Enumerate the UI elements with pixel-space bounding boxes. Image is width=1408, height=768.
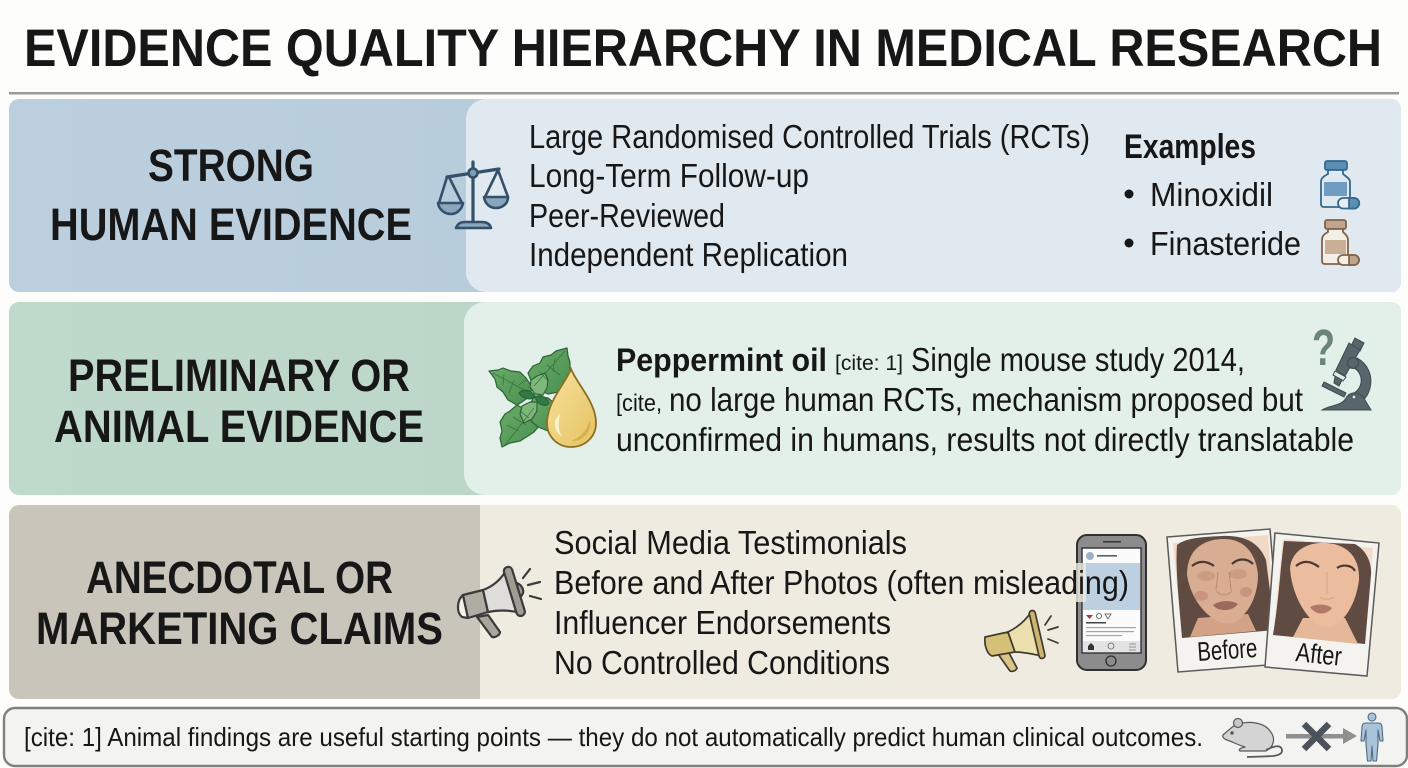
panel: strong human evidence [9,99,1401,292]
content area anecdotal [480,505,1401,699]
icon: smartphone with social post [1076,535,1146,670]
band background preliminary [9,302,1401,495]
photo: before: Before [1196,633,1258,667]
icon: peppermint leaves and oil drop [489,348,596,447]
heading anecdotal: ANECDOTAL OR [86,552,393,603]
heading strong: STRONG [148,140,314,191]
icon: blue medicine bottle [1321,161,1359,208]
criteria list anecdotal: Social Media Testimonials [554,524,907,561]
heading strong [50,140,412,250]
arrow: blocked translation from mouse to human [1286,724,1357,749]
panel: anecdotal or marketing claims [9,505,1401,699]
examples list [1124,128,1301,262]
footnote box [4,708,1407,766]
icon: question mark: ? [1312,319,1335,376]
photo: after: After [1294,637,1343,672]
icon: microscope [1322,338,1371,410]
panel: footnote [4,708,1407,766]
criteria list strong [529,118,1090,273]
band background anecdotal [9,505,1401,699]
heading preliminary [54,350,424,452]
criteria text: before and after photos: Before and After Photos (often misleading) [554,564,1129,601]
examples list: Examples [1124,128,1256,166]
content area preliminary [464,302,1401,495]
peppermint oil description [616,341,1354,458]
icon: balance scales [438,162,508,228]
photo: before [1167,529,1281,672]
icon: human figure [1361,713,1383,761]
icon: tan megaphone [985,610,1058,671]
criteria list anecdotal: Influencer Endorsements [554,604,891,641]
criteria list strong: Peer-Reviewed [529,197,725,234]
heading strong: HUMAN EVIDENCE [50,199,412,250]
criteria list anecdotal: No Controlled Conditions [554,644,890,681]
heading anecdotal [36,552,443,654]
criteria list strong: Independent Replication [529,236,848,273]
heading anecdotal: MARKETING CLAIMS [36,603,443,654]
icon: grey megaphone [458,566,541,637]
heading preliminary: ANIMAL EVIDENCE [54,401,424,452]
content area strong [466,99,1401,292]
footnote text: [cite: 1] Animal findings are useful starting points — they do not automatically predict human clinical outcomes. [24,722,1203,752]
peppermint oil description: Peppermint oil [616,342,827,378]
band background strong [9,99,1401,292]
criteria list strong: Long-Term Follow-up [529,157,809,194]
examples list: Minoxidil [1150,176,1273,213]
icon: tan medicine bottle [1322,220,1359,265]
photo: after [1265,533,1379,676]
peppermint oil description: [cite, [616,390,662,417]
examples list: Finasteride [1150,225,1301,262]
panel: preliminary or animal evidence [9,302,1401,495]
criteria list anecdotal [554,524,907,681]
heading preliminary: PRELIMINARY OR [68,350,410,401]
peppermint oil description: unconfirmed in humans, results not directly translatable [616,421,1354,458]
icon: mouse [1223,718,1282,757]
peppermint oil description: [cite: 1] [835,352,903,375]
criteria list strong: Large Randomised Controlled Trials (RCTs) [529,118,1090,155]
peppermint oil description: no large human RCTs, mechanism proposed but [669,381,1303,418]
peppermint oil description: Single mouse study 2014, [911,341,1245,378]
